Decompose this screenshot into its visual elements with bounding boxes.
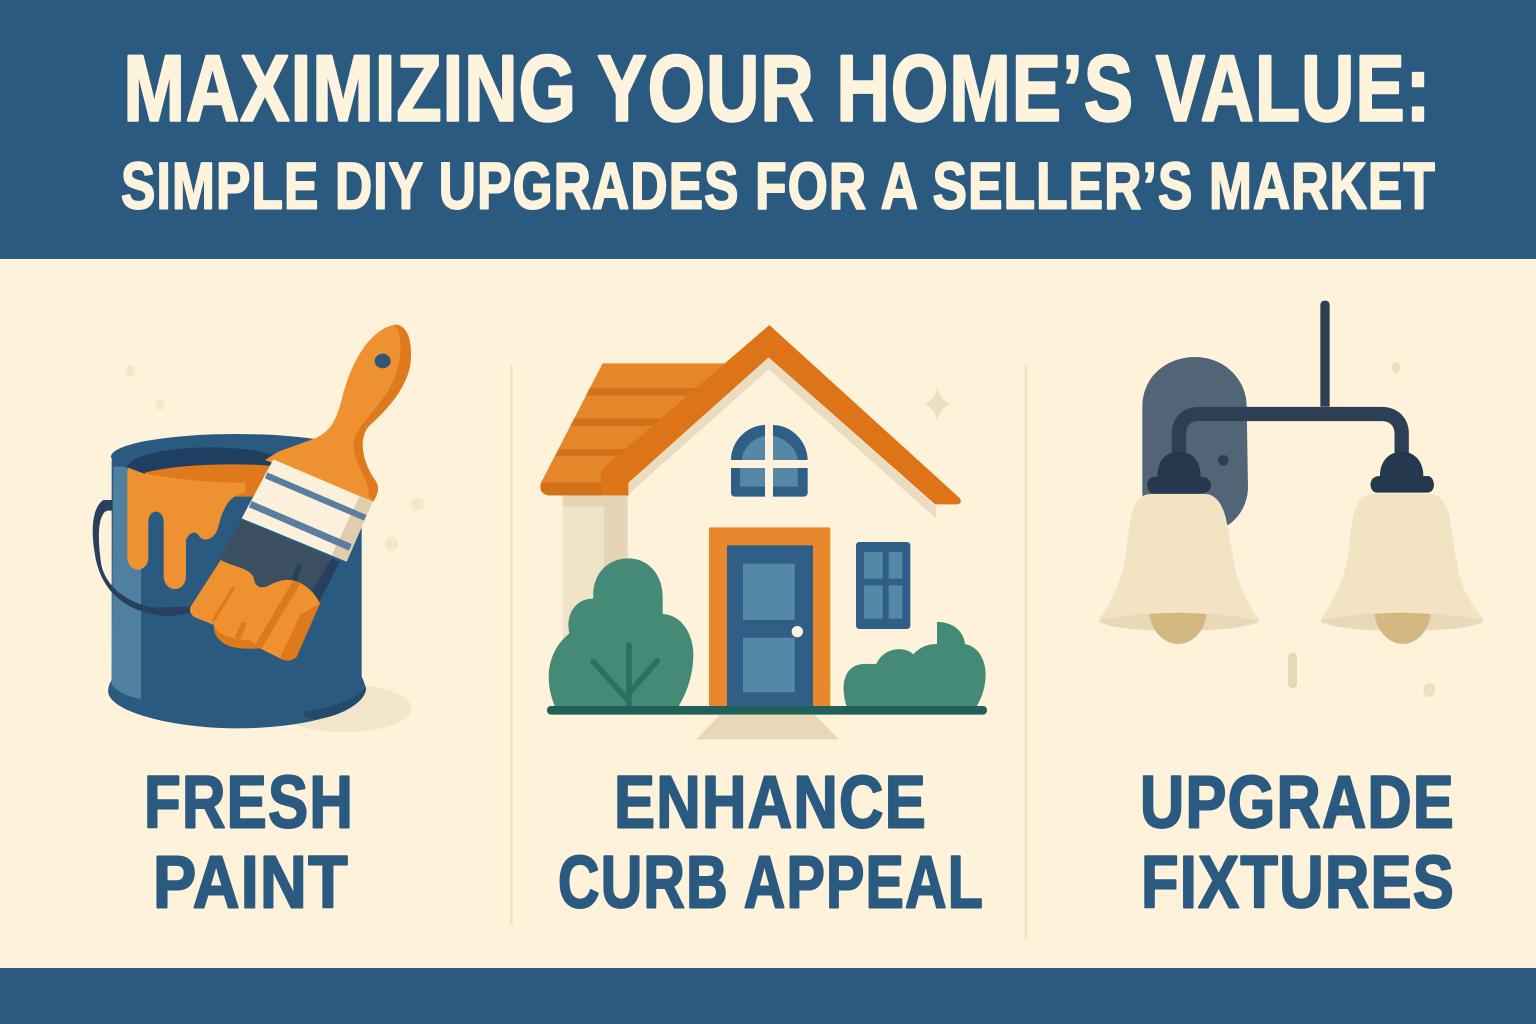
side window — [856, 542, 910, 629]
label: enhance curb appeal — [558, 760, 984, 924]
label: fresh paint: FRESH — [144, 760, 354, 844]
label: fresh paint — [144, 760, 354, 924]
sparkle — [925, 387, 951, 421]
bush branches — [593, 645, 657, 707]
ground line — [547, 706, 987, 715]
label: upgrade fixtures — [1140, 760, 1455, 924]
paint brush — [190, 325, 411, 660]
arm — [1320, 301, 1330, 407]
left socket — [1147, 452, 1211, 493]
label: upgrade fixtures: FIXTURES — [1141, 840, 1455, 924]
right shade — [1321, 494, 1483, 644]
header band — [0, 0, 1536, 259]
label: enhance curb appeal: ENHANCE — [614, 760, 927, 844]
gable roof — [601, 325, 961, 504]
left shade — [1099, 494, 1258, 644]
label: fresh paint: PAINT — [153, 840, 349, 924]
side wing — [563, 495, 628, 643]
footer band — [0, 968, 1536, 1024]
door frame — [709, 527, 830, 707]
icon: paint bucket and brush — [93, 325, 424, 732]
arched window — [731, 425, 808, 497]
wall shadow under gable — [628, 357, 936, 518]
walkway — [696, 715, 839, 739]
icon: house — [540, 325, 987, 739]
title — [121, 36, 1436, 222]
icon: wall light fixture — [1099, 301, 1483, 697]
label: upgrade fixtures: UPGRADE — [1140, 760, 1455, 844]
paint drips — [127, 467, 245, 589]
shingled roof — [540, 363, 727, 495]
backplate — [1142, 357, 1248, 525]
label: enhance curb appeal: CURB APPEAL — [558, 840, 984, 924]
door — [727, 545, 813, 707]
left bush — [549, 558, 693, 707]
right bush — [844, 622, 986, 707]
right socket — [1371, 452, 1434, 493]
